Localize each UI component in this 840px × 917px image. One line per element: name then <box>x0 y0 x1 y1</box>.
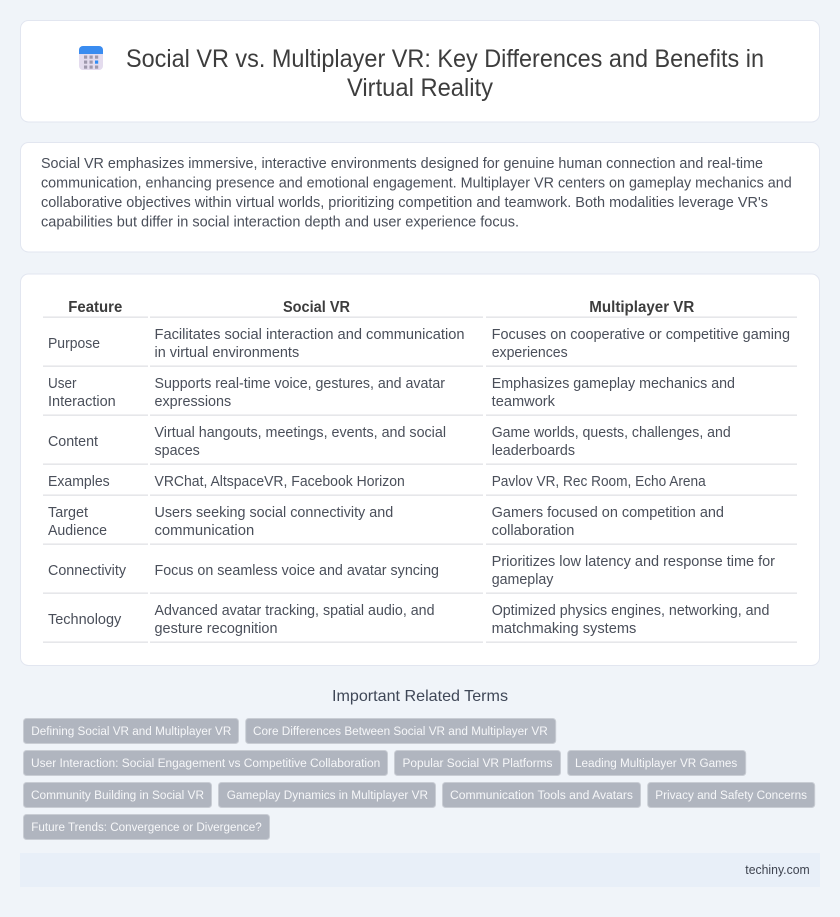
tag <box>246 718 556 744</box>
row: examples: Pavlov VR, Rec Room, Echo Arena <box>492 474 706 490</box>
row: user interaction: User <box>48 376 77 392</box>
table header row <box>68 299 695 316</box>
row: technology: gesture recognition <box>154 621 278 637</box>
title: Virtual Reality <box>347 74 493 102</box>
footer <box>20 853 820 887</box>
row: purpose: in virtual environments <box>154 345 299 361</box>
row: purpose: Purpose <box>48 336 100 352</box>
tag: Defining Social VR and Multiplayer VR <box>31 724 231 738</box>
tag: Privacy and Safety Concerns <box>655 788 807 802</box>
row: connectivity: Focus on seamless voice and avatar syncing <box>154 563 439 579</box>
row: examples: Examples <box>48 474 110 490</box>
panel: header <box>20 20 820 122</box>
table header row: Social VR <box>283 299 350 316</box>
text block: summary <box>41 156 792 230</box>
row: content: Content <box>48 434 98 450</box>
row: user interaction <box>48 376 735 410</box>
row: content: Game worlds, quests, challenges, and <box>492 425 731 441</box>
row: user interaction: expressions <box>154 394 231 410</box>
tag <box>24 718 238 744</box>
row: content <box>48 425 731 459</box>
row: content: spaces <box>154 443 200 459</box>
row: target audience: collaboration <box>492 523 574 539</box>
text block: summary: capabilities but differ in social interaction depth and user experience focus. <box>41 214 519 230</box>
text block: summary: collaborative objectives within virtual worlds, prioritizing competition and teamwork. Both modalities leverage VR's <box>41 195 768 211</box>
tag <box>568 750 746 776</box>
tag <box>24 814 270 840</box>
row: purpose: Focuses on cooperative or competitive gaming <box>492 327 790 343</box>
row: target audience: Target <box>48 505 88 521</box>
row: user interaction: Emphasizes gameplay mechanics and <box>492 376 735 392</box>
row: user interaction: teamwork <box>492 394 556 410</box>
tag <box>24 750 388 776</box>
tag <box>24 782 212 808</box>
tag: Core Differences Between Social VR and Multiplayer VR <box>253 724 548 738</box>
tag: User Interaction: Social Engagement vs Competitive Collaboration <box>31 756 380 770</box>
row: connectivity: Connectivity <box>48 563 127 579</box>
row: content: leaderboards <box>492 443 575 459</box>
panel: comparison table <box>20 274 820 666</box>
row: technology: Advanced avatar tracking, spatial audio, and <box>154 603 434 619</box>
table header row: Multiplayer VR <box>589 299 695 316</box>
text block: summary: Social VR emphasizes immersive, interactive environments designed for genuine human connection and real-time <box>41 156 763 172</box>
tag: Future Trends: Convergence or Divergence? <box>31 820 262 834</box>
row: content: Virtual hangouts, meetings, events, and social <box>154 425 446 441</box>
row: purpose <box>48 327 790 361</box>
row: examples: VRChat, AltspaceVR, Facebook Horizon <box>154 474 405 490</box>
row: purpose: experiences <box>492 345 568 361</box>
text block: summary: communication, enhancing presence and emotional engagement. Multiplayer VR centers on gameplay mechanics and <box>41 176 792 192</box>
row: target audience <box>48 505 724 539</box>
icon: calendar <box>79 46 103 70</box>
title <box>126 45 764 102</box>
tag: Community Building in Social VR <box>31 788 204 802</box>
row: technology: matchmaking systems <box>492 621 636 637</box>
panel: related term tags <box>24 718 815 840</box>
row: user interaction: Interaction <box>48 394 116 410</box>
tag <box>648 782 815 808</box>
tag <box>442 782 640 808</box>
row: purpose: Facilitates social interaction and communication <box>154 327 465 343</box>
row: technology <box>48 603 769 637</box>
tag <box>394 750 560 776</box>
row: target audience: Users seeking social connectivity and <box>154 505 393 521</box>
row: connectivity <box>48 554 775 588</box>
tag: Leading Multiplayer VR Games <box>575 756 737 770</box>
row: technology: Optimized physics engines, networking, and <box>492 603 769 619</box>
row: target audience: Audience <box>48 523 107 539</box>
heading: related terms: Important Related Terms <box>332 688 508 705</box>
title: Social VR vs. Multiplayer VR: Key Differences and Benefits in <box>126 45 764 73</box>
table rules <box>43 316 797 643</box>
tag: Communication Tools and Avatars <box>450 788 633 802</box>
footer credit: techiny.com <box>745 863 810 877</box>
row: user interaction: Supports real-time voice, gestures, and avatar <box>154 376 445 392</box>
tag: Gameplay Dynamics in Multiplayer VR <box>227 788 428 802</box>
row: target audience: communication <box>154 523 254 539</box>
row: examples <box>48 474 706 490</box>
row: target audience: Gamers focused on competition and <box>492 505 724 521</box>
row: connectivity: Prioritizes low latency and response time for <box>492 554 775 570</box>
row: connectivity: gameplay <box>492 572 554 588</box>
panel: description <box>20 142 820 252</box>
row: technology: Technology <box>48 612 122 628</box>
table header row: Feature <box>68 299 122 316</box>
tag <box>218 782 436 808</box>
tag: Popular Social VR Platforms <box>402 756 552 770</box>
